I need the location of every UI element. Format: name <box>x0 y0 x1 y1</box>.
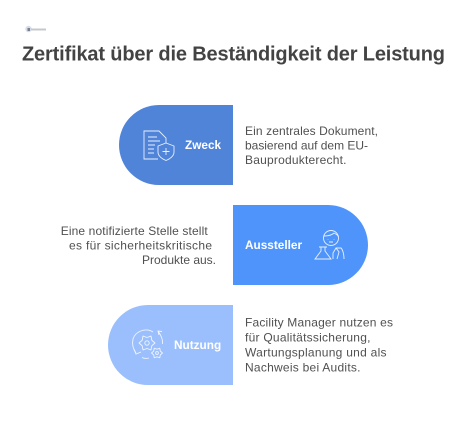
panel: Aussteller <box>233 205 368 285</box>
label: Aussteller: Aussteller <box>245 238 302 252</box>
text: Nutzung description: Facility Manager nutzen es <box>245 316 393 330</box>
text: Zweck description: basierend auf dem EU- <box>245 138 368 152</box>
text: Nutzung description: für Qualitätssicherung, <box>245 330 370 344</box>
logo <box>25 26 46 32</box>
panel: Nutzung <box>108 305 233 385</box>
panel: Zweck <box>119 105 233 185</box>
text: Aussteller description: Produkte aus. <box>142 253 216 267</box>
text: Zweck description: Ein zentrales Dokument, <box>245 124 378 138</box>
text: Nutzung description: Nachweis bei Audits. <box>245 360 360 374</box>
title: Zertifikat über die Beständigkeit der Leistung <box>22 44 445 66</box>
text: Nutzung description: Wartungsplanung und als <box>245 346 386 360</box>
text: Aussteller description: Eine notifizierte Stelle stellt <box>61 224 208 238</box>
icon: gears with cycle arrows <box>132 330 163 359</box>
icon: document with shield <box>144 130 174 161</box>
text: Zweck description: Bauprodukterecht. <box>245 153 346 167</box>
text: Aussteller description: es für sicherheitskritische <box>69 238 212 252</box>
label: Zweck: Zweck <box>185 138 221 152</box>
icon: scientist with flask <box>314 230 344 260</box>
label: Nutzung: Nutzung <box>174 338 221 352</box>
